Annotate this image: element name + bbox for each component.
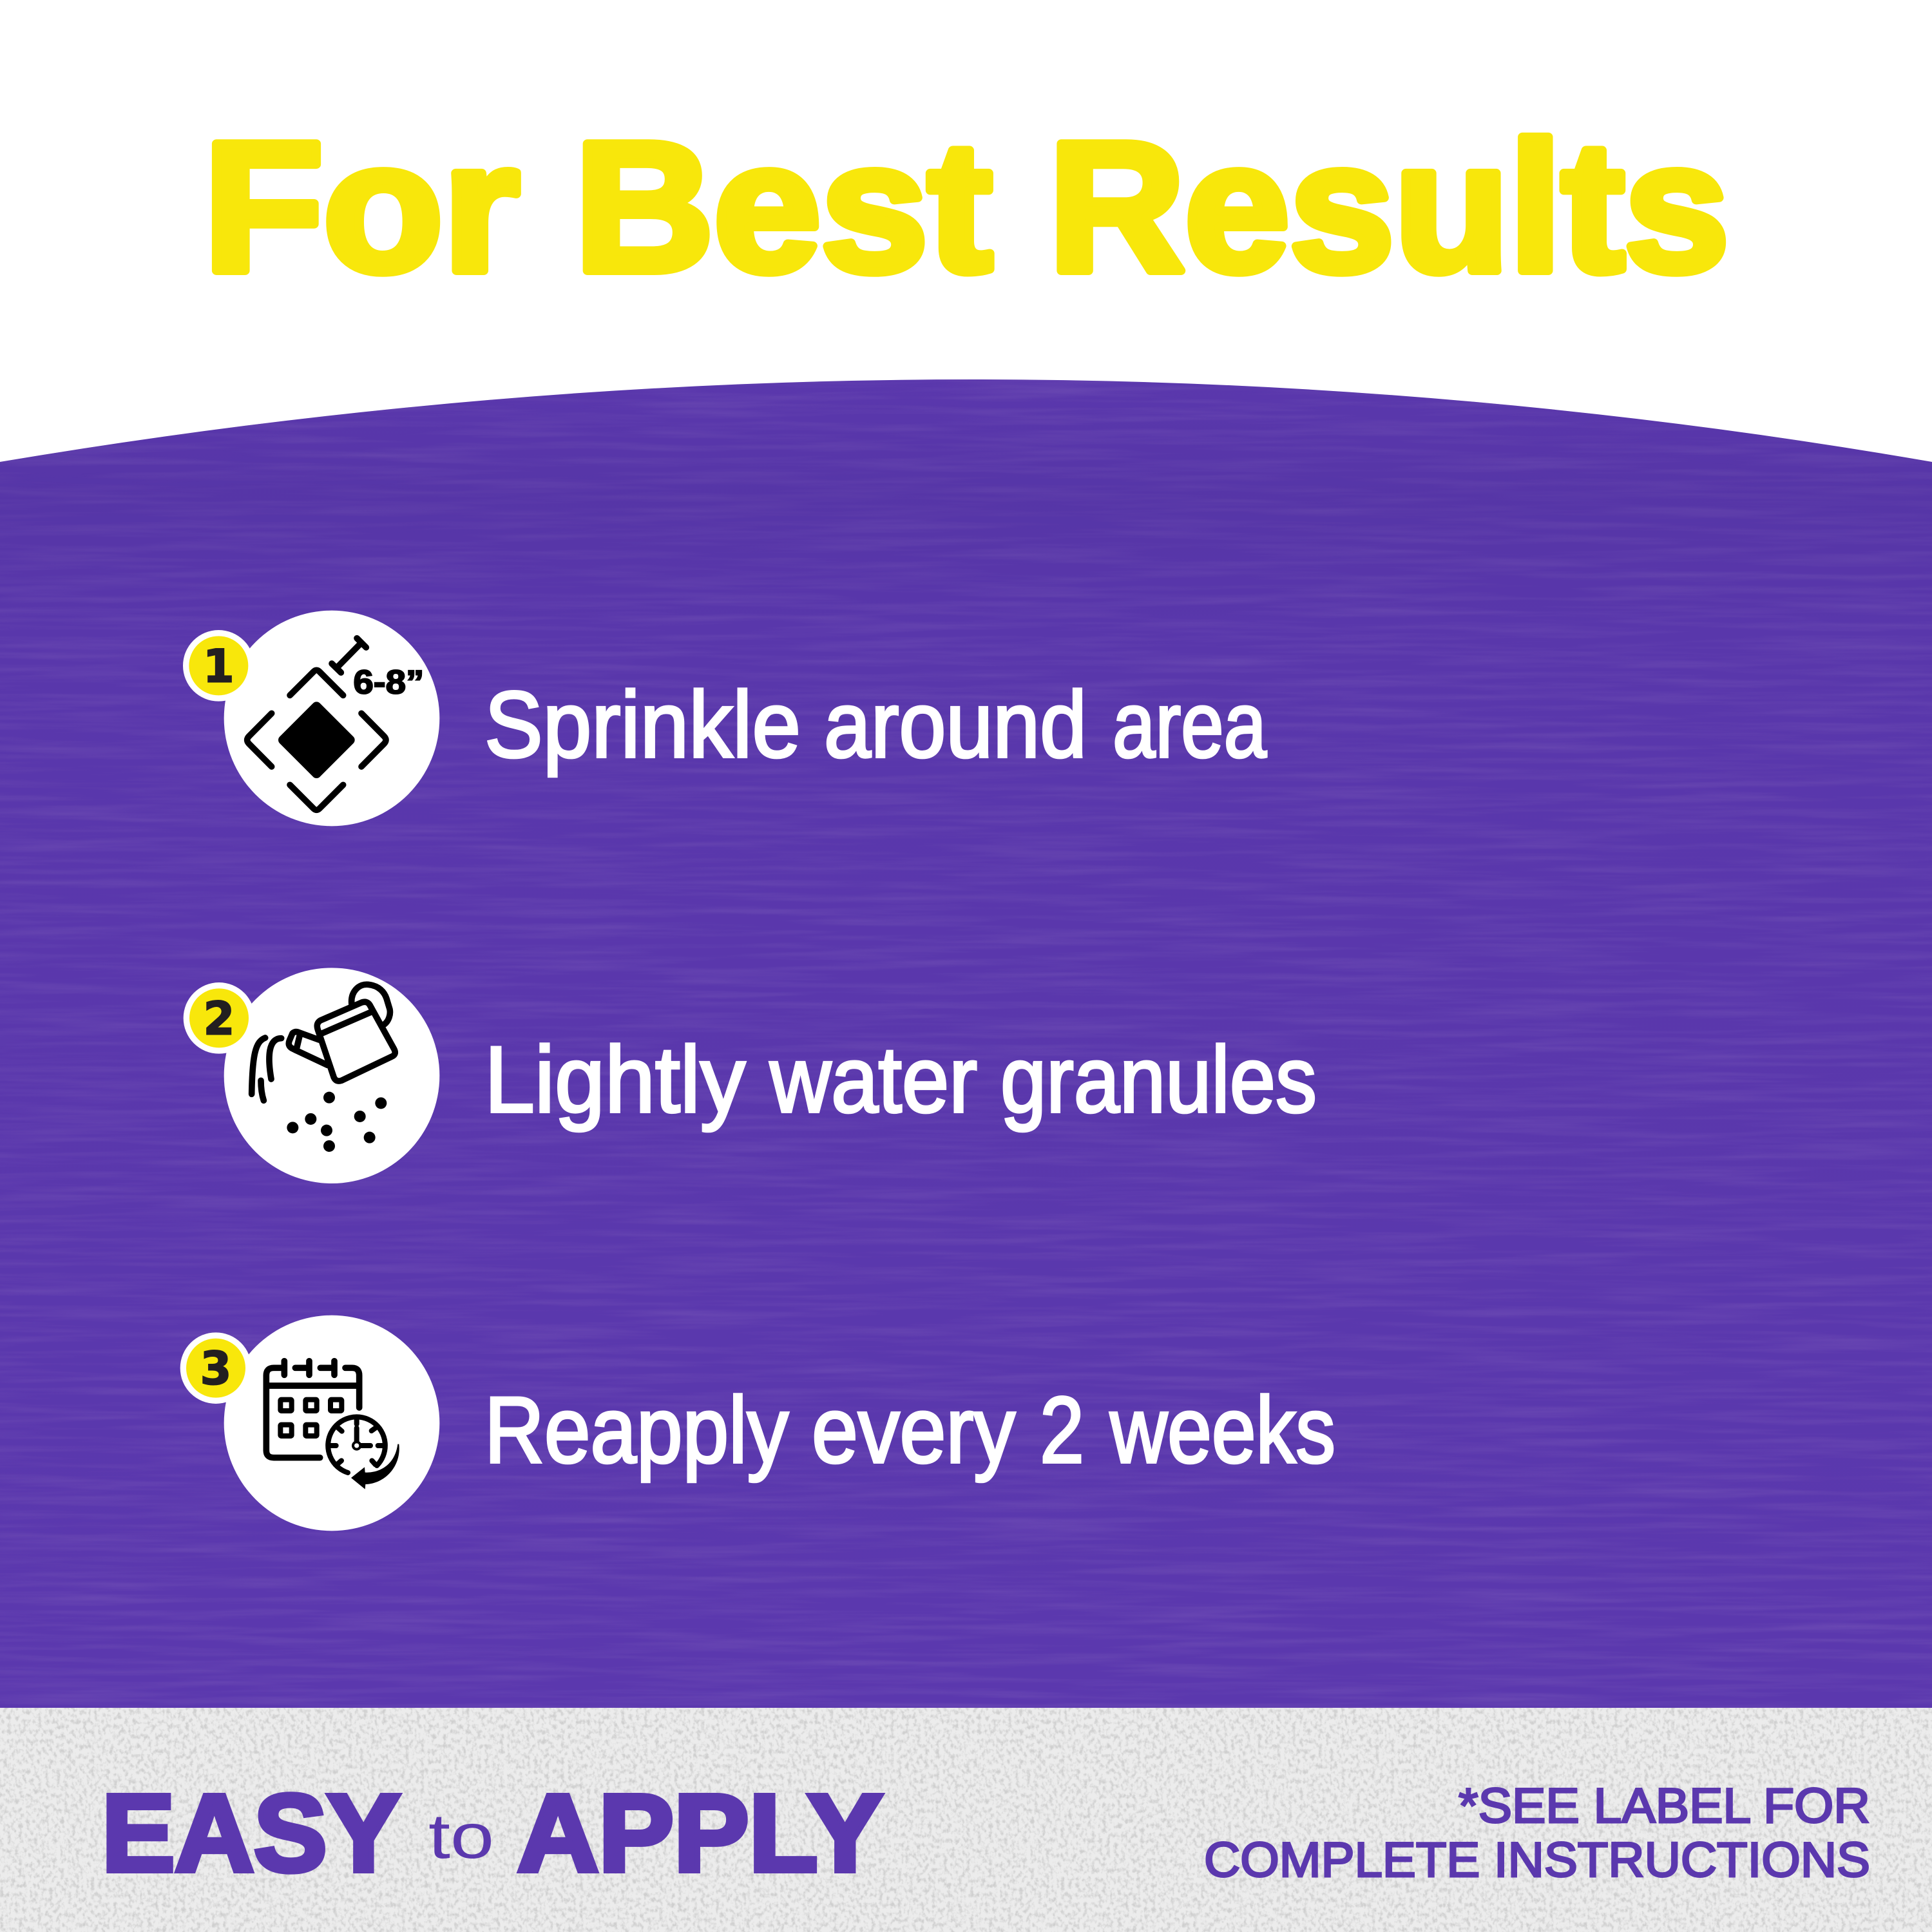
number badge 1: 1 <box>203 640 234 693</box>
step 1 text: area <box>1113 672 1267 777</box>
step 1 text <box>484 672 1267 777</box>
number badge 3: 3 <box>200 1343 231 1395</box>
footer note: *SEE LABEL FOR <box>1459 1779 1870 1833</box>
panel: purple wood background <box>0 361 1932 1714</box>
icon: watering can <box>252 984 395 1100</box>
step 3 text: weeks <box>1109 1377 1335 1482</box>
step 2 text: granules <box>1000 1027 1317 1132</box>
icon: clock with return arrow <box>328 1417 399 1489</box>
title <box>204 104 1729 310</box>
footer heading: easy to apply: to <box>428 1801 494 1871</box>
step 3 text: every <box>812 1377 1015 1482</box>
icon: spacing measure bar <box>332 638 366 673</box>
title: Best <box>575 104 992 310</box>
step 2 icon <box>184 968 439 1183</box>
step 3 text <box>484 1377 1335 1482</box>
step 1 icon <box>183 611 439 826</box>
step 2 text <box>484 1027 1317 1132</box>
label: 6-8 inches: 6-8” <box>353 664 424 701</box>
number badge 1 <box>183 630 254 702</box>
footer heading: easy to apply <box>102 1772 883 1895</box>
icon: diamond bait area with chevrons <box>247 670 386 810</box>
title: Results <box>1049 104 1729 310</box>
panel: grey textured footer background <box>0 1708 1932 1932</box>
title: For <box>204 104 519 310</box>
step 2 text: water <box>769 1027 977 1132</box>
footer note: COMPLETE INSTRUCTIONS <box>1204 1833 1870 1888</box>
footer heading: easy to apply: EASY <box>102 1772 400 1895</box>
step 1 text: Sprinkle <box>484 672 801 777</box>
icon: calendar <box>266 1361 359 1458</box>
number badge 2: 2 <box>204 992 234 1045</box>
number badge 3 <box>180 1332 251 1404</box>
step 3 text: 2 <box>1040 1377 1084 1482</box>
step 2 text: Lightly <box>484 1027 745 1132</box>
footer heading: easy to apply: APPLY <box>517 1772 883 1895</box>
footer note <box>1204 1779 1870 1888</box>
icon: granules <box>287 1092 387 1152</box>
step 1 text: around <box>824 672 1087 777</box>
number badge 2 <box>184 982 254 1054</box>
step 3 text: Reapply <box>484 1377 789 1482</box>
step 3 icon <box>180 1315 439 1531</box>
